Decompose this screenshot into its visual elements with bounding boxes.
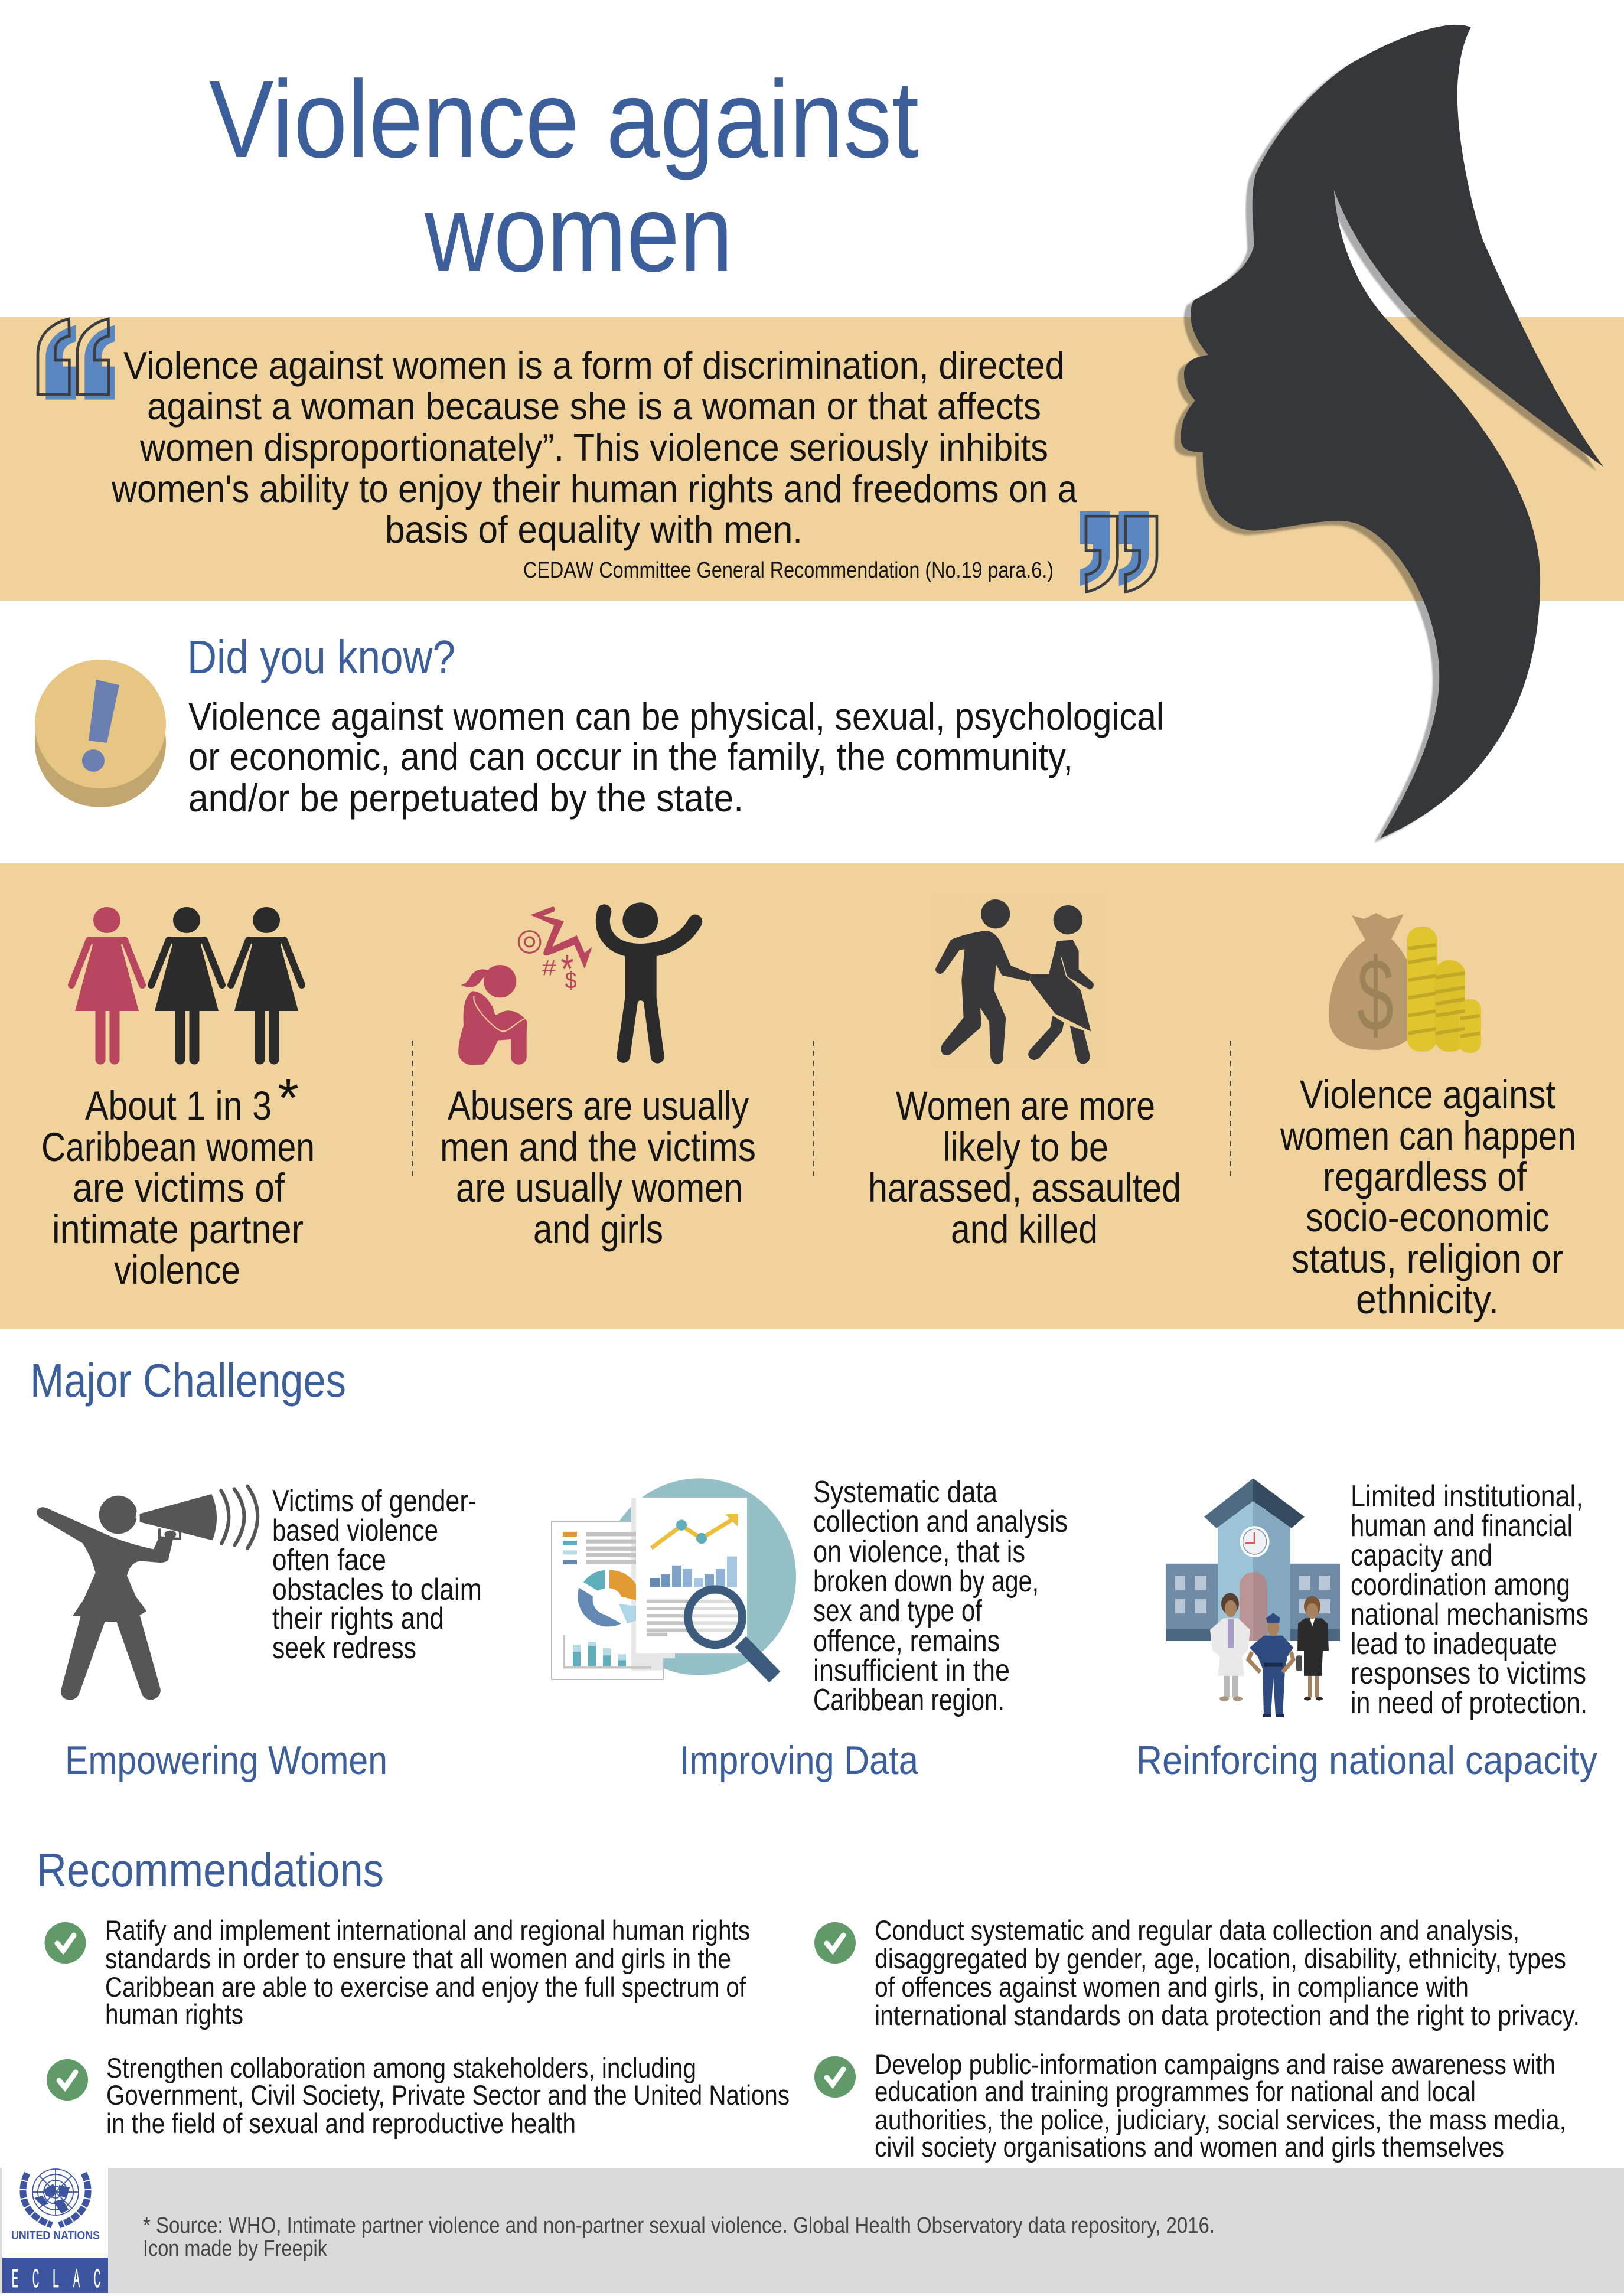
- recommendation 1: standards in order to ensure that all women and girls in the: [105, 1943, 731, 1974]
- challenge text: reinforcing capacity: [1351, 1479, 1589, 1720]
- icon: check 2: [47, 2059, 88, 2101]
- fact: regardless of status: Violence against: [1300, 1072, 1555, 1117]
- challenge text: improving data: sex and type of: [813, 1594, 982, 1628]
- quote text: women disproportionately”. This violence seriously inhibits: [139, 426, 1048, 469]
- fact: abusers: are usually women: [456, 1165, 743, 1211]
- challenge text: improving data: Caribbean region.: [813, 1683, 1005, 1717]
- heading: major challenges: Major Challenges: [30, 1354, 346, 1407]
- fact: regardless of status: status, religion or: [1292, 1236, 1563, 1281]
- quote text: Violence against women is a form of discrimination, directed: [123, 344, 1065, 387]
- quote text: women's ability to enjoy their human rights and freedoms on a: [111, 467, 1078, 510]
- recommendation 1: Ratify and implement international and regional human rights: [105, 1915, 750, 1946]
- fact: harassment: and killed: [951, 1206, 1098, 1252]
- icon: woman silhouette: [1175, 25, 1603, 843]
- label: improving data: Improving Data: [680, 1738, 918, 1783]
- heading: recommendations: Recommendations: [37, 1844, 384, 1896]
- icon: abuser and victim: [458, 902, 695, 1065]
- recommendation 2: Government, Civil Society, Private Sector and the United Nations: [106, 2079, 790, 2111]
- fact: 1 in 3: intimate partner: [52, 1206, 304, 1252]
- logo: United Nations ECLAC: L: [53, 2264, 59, 2293]
- challenge text: reinforcing capacity: responses to victims: [1351, 1656, 1586, 1691]
- icon: check 1: [45, 1922, 86, 1964]
- icon: institution building with officials: [1166, 1478, 1340, 1717]
- recommendation 4: civil society organisations and women and girls themselves: [875, 2131, 1504, 2163]
- icon: money bag and coins: [1329, 913, 1481, 1053]
- logo: United Nations ECLAC: C: [32, 2264, 39, 2293]
- footer source text: Icon made by Freepik: [143, 2236, 328, 2261]
- fact: harassment: likely to be: [943, 1124, 1108, 1170]
- icon: money bag and coins: $: [1357, 938, 1394, 1053]
- challenge text: improving data: Systematic data: [813, 1475, 997, 1509]
- challenge text: reinforcing capacity: Limited institutional,: [1351, 1479, 1583, 1514]
- recommendation 4: [875, 2049, 1566, 2163]
- police officer: [1248, 1613, 1293, 1717]
- challenge text: improving data: collection and analysis: [813, 1505, 1068, 1539]
- panel: quote band: [0, 317, 1624, 601]
- did you know text: [188, 694, 1164, 820]
- title: women: [424, 172, 733, 295]
- logo: United Nations ECLAC: [2, 2168, 108, 2293]
- icon: exclamation coin: [35, 660, 166, 807]
- icon: man grabbing woman: [931, 896, 1104, 1067]
- icon: closing quotation mark: [1080, 511, 1157, 592]
- title: Violence against: [209, 58, 919, 181]
- footer source text: [143, 2213, 1215, 2261]
- footer source text: * Source: WHO, Intimate partner violence and non-partner sexual violence. Global Health Observatory data repository, 2016.: [143, 2213, 1215, 2238]
- recommendation 2: in the field of sexual and reproductive health: [106, 2108, 576, 2139]
- icon: abuser and victim: $: [565, 967, 577, 993]
- fact: 1 in 3: *: [278, 1069, 299, 1128]
- fact: 1 in 3: Caribbean women: [41, 1124, 315, 1170]
- logo: United Nations ECLAC: E: [12, 2264, 18, 2293]
- panel: facts band: [0, 863, 1624, 1329]
- recommendation 2: [106, 2052, 790, 2139]
- challenge text: reinforcing capacity: human and financial: [1351, 1509, 1573, 1543]
- recommendation 1: Caribbean are able to exercise and enjoy the full spectrum of: [105, 1971, 746, 2003]
- did you know text: and/or be perpetuated by the state.: [188, 776, 743, 820]
- challenge text: improving data: offence, remains: [813, 1624, 1000, 1658]
- fact: regardless of status: socio-economic: [1306, 1195, 1550, 1240]
- logo: United Nations ECLAC: A: [73, 2264, 80, 2293]
- did you know text: Violence against women can be physical, sexual, psychological: [188, 694, 1164, 738]
- quote attribution: CEDAW Committee General Recommendation (No.19 para.6.): [523, 558, 1054, 583]
- fact: 1 in 3: About 1 in 3: [85, 1083, 272, 1129]
- fact: 1 in 3: are victims of: [73, 1165, 285, 1211]
- challenge text: reinforcing capacity: coordination among: [1351, 1568, 1570, 1602]
- recommendation 3: Conduct systematic and regular data collection and analysis,: [875, 1915, 1519, 1946]
- challenge text: improving data: on violence, that is: [813, 1535, 1025, 1569]
- fact: regardless of status: [1280, 1072, 1576, 1322]
- recommendation 1: human rights: [105, 1998, 243, 2030]
- challenge text: empowering women: based violence: [272, 1514, 438, 1548]
- challenge text: empowering women: [272, 1484, 482, 1665]
- icon: check 3: [814, 1922, 856, 1964]
- challenge text: reinforcing capacity: lead to inadequate: [1351, 1627, 1557, 1661]
- fact: harassment: Women are more: [896, 1083, 1155, 1129]
- fact: abusers: [440, 1083, 756, 1252]
- quote text: [111, 344, 1078, 551]
- quote text: basis of equality with men.: [385, 508, 803, 551]
- fact: 1 in 3: [41, 1069, 315, 1293]
- fact: abusers: Abusers are usually: [448, 1083, 749, 1129]
- label: empowering women: Empowering Women: [65, 1738, 387, 1783]
- icon: opening quotation mark: [38, 319, 115, 400]
- challenge text: improving data: broken down by age,: [813, 1564, 1039, 1599]
- fact: harassment: [868, 1083, 1181, 1252]
- heading: did you know: Did you know?: [187, 631, 455, 683]
- challenge text: reinforcing capacity: capacity and: [1351, 1538, 1492, 1573]
- challenge text: empowering women: their rights and: [272, 1602, 444, 1636]
- panel: footer band: [0, 2168, 1624, 2293]
- title: [209, 58, 919, 295]
- icon: data report and magnifier: [552, 1478, 796, 1679]
- challenge text: improving data: [813, 1475, 1068, 1717]
- fact: harassment: harassed, assaulted: [868, 1165, 1181, 1211]
- icon: abuser and victim: #: [542, 956, 556, 980]
- fact: abusers: men and the victims: [440, 1124, 756, 1170]
- logo: United Nations ECLAC: C: [94, 2264, 100, 2293]
- recommendation 4: education and training programmes for national and local: [875, 2076, 1476, 2107]
- challenge text: improving data: insufficient in the: [813, 1653, 1010, 1688]
- recommendation 1: [105, 1915, 750, 2030]
- recommendation 3: [875, 1915, 1580, 2031]
- did you know text: or economic, and can occur in the family, the community,: [188, 735, 1073, 778]
- fact: regardless of status: ethnicity.: [1356, 1277, 1499, 1322]
- challenge text: empowering women: obstacles to claim: [272, 1573, 482, 1607]
- doctor: [1210, 1593, 1250, 1701]
- challenge text: empowering women: Victims of gender-: [272, 1484, 477, 1518]
- icon: woman with megaphone: [37, 1486, 257, 1700]
- logo: United Nations ECLAC: UNITED NATIONS: [11, 2229, 100, 2242]
- recommendation 3: of offences against women and girls, in compliance with: [875, 1971, 1469, 2003]
- fact: 1 in 3: violence: [114, 1247, 240, 1293]
- fact: abusers: and girls: [533, 1206, 663, 1252]
- quote text: against a woman because she is a woman or that affects: [147, 384, 1041, 428]
- fact: regardless of status: regardless of: [1323, 1154, 1527, 1199]
- challenge text: empowering women: seek redress: [272, 1631, 416, 1665]
- icon: three women: [71, 907, 302, 1059]
- icon: check 4: [814, 2056, 856, 2098]
- challenge text: empowering women: often face: [272, 1543, 386, 1577]
- woman in suit: [1296, 1596, 1329, 1701]
- recommendation 2: Strengthen collaboration among stakeholders, including: [106, 2052, 696, 2083]
- icon: abuser and victim: *: [560, 946, 573, 992]
